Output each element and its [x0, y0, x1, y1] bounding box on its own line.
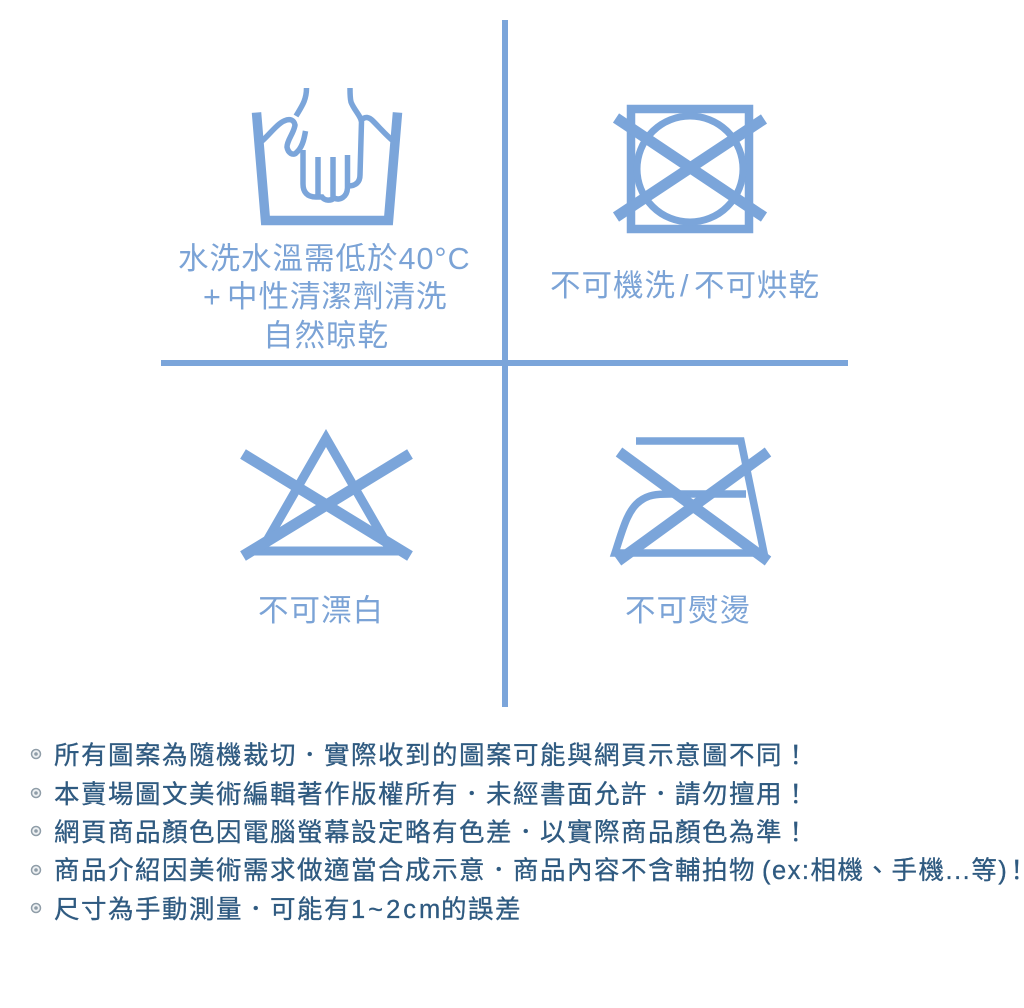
label: wash instructions: 水洗水溫需低於40°C [178, 242, 471, 276]
note 5: 尺寸為手動測量．可能有 [54, 896, 351, 924]
icon: crossed square and circle [616, 109, 764, 229]
label: no ironing: 不可熨燙 [625, 594, 751, 628]
label: no bleach: 不可漂白 [258, 594, 384, 628]
label: wash instructions: + [203, 280, 222, 314]
panel: no machine wash [550, 109, 820, 303]
note 1: 所有圖案為隨機裁切．實際收到的圖案可能與網頁示意圖不同！ [54, 742, 810, 770]
panel: no bleach [243, 438, 410, 628]
label: wash instructions: 自然晾乾 [263, 319, 389, 353]
label: no machine wash or tumble dry: 不可機洗 [550, 269, 676, 303]
note 4: 商品介紹因美術需求做適當合成示意．商品內容不含輔拍物 [54, 857, 756, 885]
note 5 [32, 896, 522, 924]
icon: crossed triangle [243, 438, 410, 556]
panel: no ironing [615, 441, 768, 628]
label: wash instructions: 中性清潔劑清洗 [227, 280, 448, 314]
note 4: (ex:相機、手機...等) [762, 857, 1008, 885]
panel: hand wash [178, 88, 471, 353]
note 5: 1~2cm [351, 896, 443, 924]
label: no machine wash or tumble dry: 不可烘乾 [694, 269, 820, 303]
icon: hand wash basin [256, 88, 398, 220]
note 3: 網頁商品顏色因電腦螢幕設定略有色差．以實際商品顏色為準！ [54, 819, 810, 847]
label: no machine wash or tumble dry: / [680, 269, 689, 303]
notes list [32, 742, 1024, 924]
note 2: 本賣場圖文美術編輯著作版權所有．未經書面允許．請勿擅用！ [54, 781, 810, 809]
note 5: 的誤差 [441, 896, 522, 924]
label: wash instructions [178, 242, 471, 353]
icon: crossed iron [615, 441, 768, 561]
